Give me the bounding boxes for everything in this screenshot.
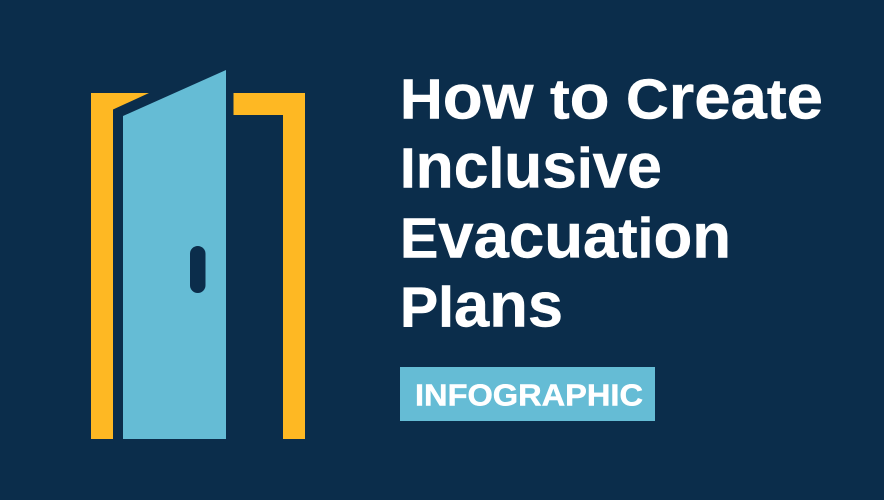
title — [400, 62, 823, 341]
door handle — [190, 246, 206, 293]
badge: infographic: INFOGRAPHIC — [415, 378, 643, 413]
title: Plans — [400, 271, 563, 341]
title: Evacuation — [400, 201, 731, 271]
door frame: right side — [234, 93, 305, 439]
badge: infographic — [400, 367, 655, 421]
title: Inclusive — [400, 132, 662, 202]
door panel — [123, 70, 226, 439]
icon: open door — [91, 70, 305, 439]
door frame: left side — [91, 93, 149, 439]
title: How to Create — [400, 62, 823, 132]
